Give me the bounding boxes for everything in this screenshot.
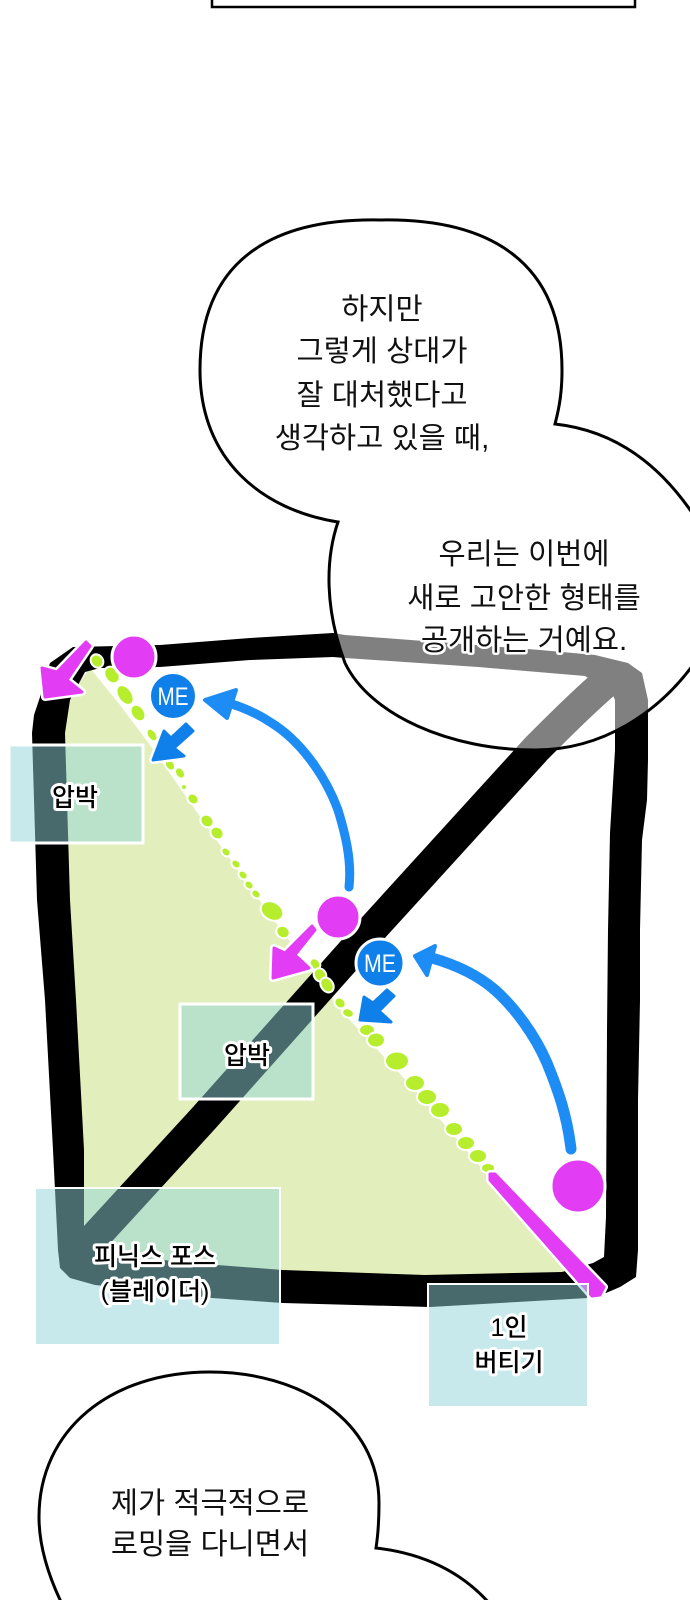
map: black outer frame (32, 633, 648, 1307)
label text: solo hold (474, 1314, 544, 1377)
blue curved arrow top (205, 690, 350, 887)
label text: solo hold: 1인 (491, 1314, 527, 1342)
speech text: bottom bubble: 로밍을 다니면서 (111, 1528, 309, 1561)
top panel edge (212, 0, 635, 7)
label text: phoenix force: 피닉스 포스 (94, 1243, 216, 1271)
label box: pressure middle (180, 1004, 313, 1099)
speech text: upper bubble: 잘 대처했다고 (296, 379, 468, 412)
speech text: lower bubble: 새로 고안한 형태를 (407, 582, 641, 615)
blue ME badge bottom: ME (364, 950, 396, 978)
label box: pressure top (9, 745, 143, 843)
speech text: bottom bubble: 제가 적극적으로 (111, 1487, 309, 1520)
pink enemy circles (112, 635, 605, 1213)
label box: solo hold (428, 1284, 588, 1407)
blue ME badge bottom (356, 939, 404, 987)
speech text: lower bubble: 우리는 이번에 (438, 538, 610, 571)
speech text: upper bubble: 하지만 (341, 293, 423, 326)
speech text: upper bubble (275, 293, 489, 455)
label box: phoenix force (35, 1188, 280, 1345)
speech text: lower bubble: 공개하는 거예요. (421, 624, 627, 657)
label text: pressure top: 압박 (52, 784, 98, 812)
speech text: upper bubble: 그렇게 상대가 (296, 335, 468, 368)
pink pressure arrow top (42, 642, 90, 697)
speech bubble: upper double bubble (200, 220, 690, 750)
speech text: upper bubble: 생각하고 있을 때, (275, 422, 489, 455)
pink pressure arrow middle (273, 926, 315, 978)
blue ME badge top: ME (158, 683, 188, 711)
label text: phoenix force: (블레이더) (101, 1278, 209, 1306)
label text: phoenix force (94, 1243, 216, 1306)
label text: solo hold: 버티기 (474, 1349, 544, 1377)
map: black diagonal lane (72, 672, 618, 1262)
speech text: lower bubble (407, 538, 641, 657)
speech bubble: bottom bubble (39, 1372, 490, 1600)
label text: pressure middle: 압박 (224, 1042, 270, 1070)
dotted lime lane line (89, 653, 494, 1172)
speech text: bottom bubble (111, 1487, 309, 1561)
map: green lane triangle (62, 668, 585, 1285)
pink solo lane stroke (490, 1174, 604, 1296)
blue move arrow top (153, 724, 193, 760)
blue ME badge top (150, 673, 196, 719)
blue curved arrow bottom (415, 946, 571, 1149)
blue move arrow bottom (360, 990, 394, 1022)
